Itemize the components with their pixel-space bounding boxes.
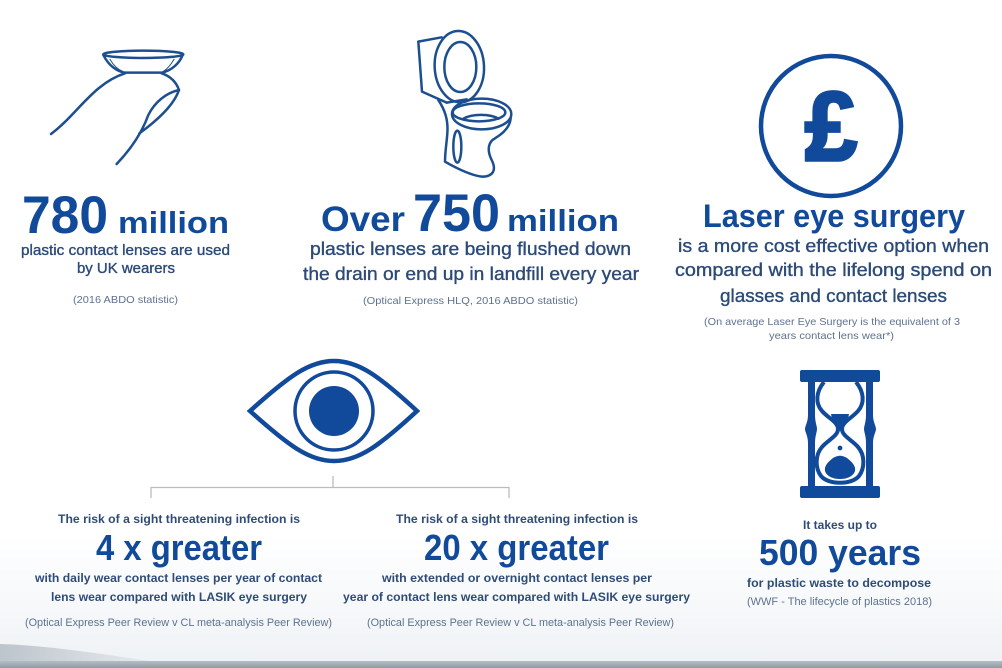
column: 20 x greater: 20 x greater (424, 527, 609, 568)
source note (704, 316, 960, 342)
column: 20 x greater: with extended or overnight contact lenses per (381, 571, 652, 585)
panel: laser eye surgery (675, 56, 992, 342)
text: cost effective option: is a more cost effective option when (678, 236, 989, 256)
panel: 780 million: million (118, 205, 229, 240)
heading: 500 years: 500 years (759, 532, 921, 573)
text: used by UK wearers: by UK wearers (77, 261, 175, 277)
icon: hourglass (800, 370, 880, 498)
text: cost effective option (675, 236, 992, 306)
text: used by UK wearers: plastic contact lenses are used (21, 243, 230, 259)
column: 20 x greater: (Optical Express Peer Review v CL meta-analysis Peer Review) (367, 617, 674, 629)
column: 4 x greater: 4 x greater (96, 527, 262, 568)
heading: laser eye surgery: Laser eye surgery (703, 198, 965, 234)
source note: (WWF - The lifecycle of plastics 2018) (747, 596, 932, 608)
panel: over 750 million (303, 30, 639, 307)
text: flushed down the drain: plastic lenses are being flushed down (310, 239, 631, 259)
text: used by UK wearers (21, 243, 230, 277)
heading: over 750 million (321, 184, 619, 243)
icon: eye (250, 361, 417, 461)
icon: pound coin (761, 56, 901, 196)
column: 4 x greater: The risk of a sight threatening infection is (58, 512, 300, 526)
panel: 780 million (21, 51, 230, 306)
source note: (On average Laser Eye Surgery is the equivalent of 3 (704, 316, 960, 328)
source note: (Optical Express HLQ, 2016 ABDO statistic) (363, 295, 578, 307)
text: cost effective option: glasses and contact lenses (720, 286, 947, 306)
connector bracket (151, 476, 509, 498)
text: plastic waste: for plastic waste to decompose (747, 576, 931, 590)
column: 4 x greater: with daily wear contact lenses per year of contact (34, 571, 322, 585)
panel: infection risk (25, 361, 690, 629)
heading: over 750 million: million (507, 203, 619, 238)
heading: 780 million: 780 (22, 186, 108, 245)
text: cost effective option: compared with the lifelong spend on (675, 260, 992, 280)
column: 20 x greater: year of contact lens wear compared with LASIK eye surgery (343, 590, 690, 604)
heading: over 750 million: Over (321, 200, 405, 239)
text: flushed down the drain (303, 239, 639, 284)
column: 4 x greater: (Optical Express Peer Review v CL meta-analysis Peer Review) (25, 617, 332, 629)
column: 20 x greater: The risk of a sight threatening infection is (396, 512, 638, 526)
source note: (2016 ABDO statistic) (73, 294, 178, 306)
heading: over 750 million: 750 (413, 184, 500, 243)
panel: 500 years (747, 370, 932, 608)
column: 20 x greater (343, 512, 690, 629)
text: flushed down the drain: the drain or end up in landfill every year (303, 264, 639, 284)
column: 4 x greater: lens wear compared with LASIK eye surgery (51, 590, 307, 604)
column: 4 x greater (25, 512, 332, 629)
source note: years contact lens wear*) (769, 330, 894, 342)
text: it takes up to: It takes up to (803, 518, 877, 532)
icon: toilet (418, 30, 511, 177)
icon: contact lens on finger (51, 51, 183, 164)
icon: pound coin: £ (805, 72, 857, 181)
